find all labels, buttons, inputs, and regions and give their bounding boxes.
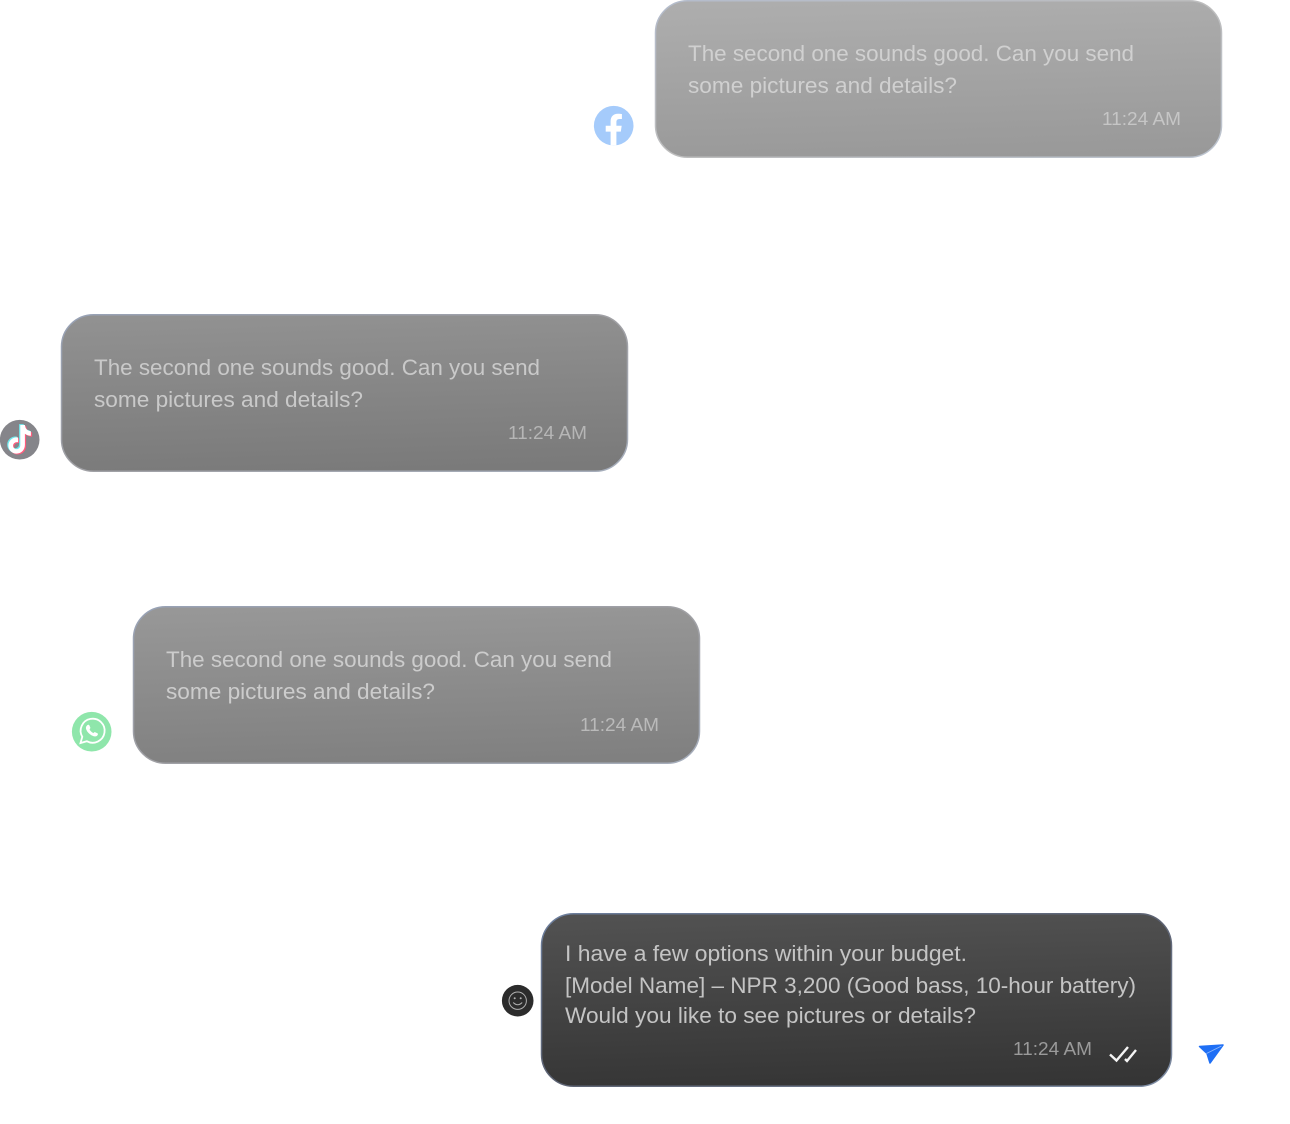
message text	[166, 647, 612, 704]
message text	[688, 41, 1134, 98]
message text: some pictures and details?	[166, 679, 435, 704]
icon: WhatsApp	[72, 712, 111, 752]
message text: some pictures and details?	[94, 387, 363, 412]
message text: some pictures and details?	[688, 73, 957, 98]
chat message: Facebook	[594, 1, 1222, 157]
chat message: agent reply	[502, 914, 1172, 1086]
message text: The second one sounds good. Can you send	[166, 647, 612, 672]
message text: Would you like to see pictures or details?	[565, 1003, 976, 1028]
message bubble	[62, 315, 628, 471]
icon: Facebook	[594, 106, 634, 146]
message text: The second one sounds good. Can you send	[94, 355, 540, 380]
timestamp: 11:24 AM	[1013, 1038, 1092, 1059]
message text	[565, 941, 1136, 1028]
icon: blue send arrow	[1200, 1045, 1223, 1063]
icon: double check	[1110, 1047, 1136, 1061]
timestamp: 11:24 AM	[580, 714, 659, 735]
message text	[94, 355, 540, 412]
message text: The second one sounds good. Can you send	[688, 41, 1134, 66]
message bubble	[134, 607, 700, 763]
icon: smiley avatar	[502, 985, 534, 1016]
message text: [Model Name] – NPR 3,200 (Good bass, 10-hour battery)	[565, 973, 1136, 998]
message bubble	[656, 1, 1222, 157]
timestamp: 11:24 AM	[1102, 108, 1181, 129]
chat message: WhatsApp	[72, 607, 699, 763]
timestamp: 11:24 AM	[508, 422, 587, 443]
chat message: TikTok	[0, 315, 627, 471]
icon: TikTok	[0, 420, 40, 460]
message text: I have a few options within your budget.	[565, 941, 967, 966]
message bubble	[542, 914, 1172, 1086]
